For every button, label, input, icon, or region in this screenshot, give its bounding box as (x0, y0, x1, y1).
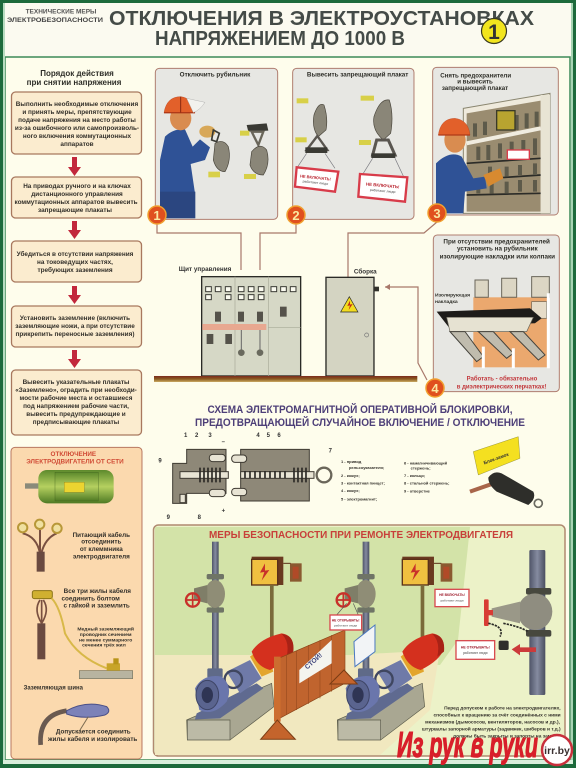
arrow down (68, 157, 81, 176)
title: НАПРЯЖЕНИЕМ ДО 1000 В (155, 27, 405, 50)
sign on valve: работают люди (463, 651, 488, 655)
legend: left column: 5 - электромагнит; (341, 497, 377, 502)
step 5 (12, 370, 142, 435)
watermark logo: irr.by (544, 745, 570, 757)
step 1 (12, 92, 142, 154)
badge: step 3 (428, 204, 446, 222)
panel: insulating covers: установить на рубильник (457, 245, 539, 253)
legend: left column: 4 - кожух; (341, 488, 360, 493)
badge: step 1: 1 (153, 208, 161, 223)
step 4: Установить заземление (включить (20, 315, 130, 322)
step 3: Убедиться в отсутствии напряжения (17, 250, 134, 258)
text: disconnect cable: от клеммника (80, 546, 123, 553)
heading: interlock scheme (195, 403, 525, 429)
heading: disconnect motor: ЭЛЕКТРОДВИГАТЕЛИ ОТ СЕТИ (26, 458, 124, 465)
panel: remove fuses: запрещающий плакат (442, 85, 508, 92)
heading: order of actions: при снятии напряжения (27, 78, 122, 87)
panel: remove fuses (433, 67, 558, 215)
badge: step 3: 3 (433, 206, 441, 221)
badge: number 1 (482, 18, 506, 44)
arrow down (68, 350, 81, 368)
step 1: подаче напряжения на место работы (18, 116, 136, 124)
icon: right breaker with sign: работают люди (370, 188, 396, 194)
step 1: аппаратов (60, 141, 94, 148)
panel: insulating covers: Изолирующая (435, 293, 470, 299)
fence with stop sign (261, 630, 357, 739)
panel: safety during motor repair (154, 525, 565, 756)
text: copper wire note: Медный заземляющий (77, 626, 134, 633)
diagram: interlock scheme: 8 (198, 515, 202, 521)
panel: remove fuses: и вывесить (457, 79, 493, 86)
diagram: interlock scheme: 4 (256, 433, 260, 439)
icon: right breaker with sign: НЕ ВКЛЮЧАТЬ! (366, 182, 400, 189)
diagram: interlock scheme: 3 (208, 433, 212, 439)
blue plate (354, 625, 375, 667)
text: connect all three wires (61, 587, 131, 609)
note: before admitting to work: штурвалы запорной арматуры (задвижек, шиберов и т.д.) (422, 726, 561, 733)
title (109, 7, 534, 50)
legend: left column: 1 - привод (341, 459, 362, 464)
text: disconnect cable: электродвигателя (73, 553, 130, 560)
legend: right column: 7 - кольцо; (404, 473, 425, 478)
arrowhead: connector 4 (385, 284, 390, 290)
badge: step 4: 4 (431, 381, 439, 396)
text: copper wire note: проводник сечением (80, 632, 132, 638)
diagram: interlock scheme: 9 (167, 515, 171, 521)
arrow down (68, 286, 81, 304)
red arrow (512, 644, 536, 655)
badge: step 2 (287, 206, 305, 224)
step 4: прикрепить переносные заземления) (16, 331, 134, 338)
diagram: interlock scheme: 6 (277, 433, 281, 439)
text: copper wire note: не менее суммарного (79, 637, 132, 643)
step 3: на токоведущих частях, (37, 259, 113, 266)
panel: insulating covers (433, 235, 559, 392)
subtitle: section label: ЭЛЕКТРОБЕЗОПАСНОСТИ (7, 17, 103, 24)
note: before admitting to work: способных к вращению за счёт соединённых с ними (433, 711, 561, 718)
step 5: вывесить предупреждающие и (26, 411, 126, 418)
legend: left column: рельсоуказателя; (349, 465, 384, 470)
panel: switch off the breaker (155, 68, 278, 219)
diagram: interlock scheme: 7 (329, 448, 333, 454)
panel: hang prohibiting sign: Вывесить запрещающий плакат (307, 70, 408, 78)
note: before admitting to work: должны быть закрыты и запорты на замок (453, 733, 557, 740)
icon: interlock key with sign (470, 437, 542, 507)
text: connect all three wires: соединить болтом (61, 594, 120, 602)
text: disconnect cable (73, 531, 130, 560)
icon: cable lugs (18, 520, 62, 572)
note: before admitting to work: механизмов (дымососов, вентиляторов, насосов и др.), (425, 720, 561, 726)
heading: interlock scheme: СХЕМА ЭЛЕКТРОМАГНИТНОЙ ОПЕРАТИВНОЙ БЛОКИРОВКИ, (208, 403, 512, 416)
text: insulate wires (47, 728, 137, 743)
label: assembly: Сборка (354, 267, 377, 275)
legend: right column: стержень; (411, 466, 431, 471)
diagram: interlock scheme (158, 433, 542, 521)
heading: safety measures: МЕРЫ БЕЗОПАСНОСТИ ПРИ РЕМОНТЕ ЭЛЕКТРОДВИГАТЕЛЯ (209, 530, 513, 541)
note: before admitting to work (422, 705, 561, 740)
warning text (457, 375, 547, 390)
panel: insulating covers: накладка (435, 299, 458, 305)
subtitle: section label (7, 8, 103, 24)
step 5: под напряжением рабочие части, (23, 402, 129, 410)
equipment: control panel and cabinet (154, 266, 417, 382)
panel: disconnect motor from mains (11, 447, 142, 759)
heading: disconnect motor: ОТКЛЮЧЕНИЕ (51, 451, 96, 458)
cabinet with warning (326, 277, 379, 376)
step 4: заземляющие ножи, а при отсутствие (15, 323, 135, 330)
legend: right column (404, 460, 449, 494)
panel: switch off the breaker: Отключить рубильник (180, 70, 251, 78)
backdrop: wall (155, 527, 470, 665)
text: insulate wires: жилы кабеля и изолировать (47, 735, 137, 743)
icon: worker (160, 97, 215, 218)
pipe with valve (484, 550, 552, 695)
floor (154, 376, 417, 382)
icon: left breaker with sign (295, 98, 338, 192)
step 1: Выполнить необходимые отключения (16, 100, 138, 108)
legend: right column: 6 - намагничивающий (404, 460, 448, 465)
diagram: interlock scheme: – (222, 439, 226, 445)
control panel (202, 277, 301, 376)
step 3 (12, 241, 142, 282)
text: insulate wires: Допускается соединить (56, 728, 131, 735)
panel: insulating covers: При отсутствии предохранителей (443, 238, 550, 246)
step 4 (12, 306, 142, 347)
step 3: требующих заземления (37, 266, 113, 274)
diagram: interlock scheme: 2 (195, 433, 199, 439)
icon: breaker handles (208, 123, 268, 179)
warning text: в диэлектрических перчатках! (457, 384, 547, 390)
sign on valve (456, 641, 495, 659)
heading: interlock scheme: ПРЕДОТВРАЩАЮЩЕЙ СЛУЧАЙНОЕ ВКЛЮЧЕНИЕ / ОТКЛЮЧЕНИЕ (195, 416, 525, 429)
icon: breaker with insulating plate (437, 277, 549, 368)
legend: left column: 3 - контактная пинцет; (341, 480, 385, 485)
sign on motor switch (435, 589, 469, 607)
text: connect all three wires: с гайкой и заземлить (64, 601, 130, 609)
note: before admitting to work: Перед допуском к работе на электродвигателях, (444, 705, 561, 712)
text: copper wire note (77, 626, 134, 649)
right column illustrations (433, 67, 558, 215)
panel: order of actions (12, 69, 142, 435)
connector lines to equipment (157, 222, 437, 380)
pump unit left (186, 542, 302, 740)
icon: left breaker with sign: НЕ ВКЛЮЧАТЬ! (300, 173, 331, 182)
backdrop: floor (155, 650, 440, 755)
icon: grounded cable (32, 591, 133, 679)
badge: step 4 (426, 379, 444, 397)
step 5: «Заземлено», оградить при необходи- (15, 386, 137, 394)
step 2: коммутационных аппаратов вывесить (14, 199, 138, 206)
badge: number 1: 1 (488, 21, 500, 44)
arrow down (68, 221, 81, 239)
step 2: На приводах ручного и на ключах (23, 183, 131, 190)
label: control panel: Щит управления (179, 266, 232, 273)
panel: hang prohibiting sign (293, 68, 414, 219)
legend: right column: 8 - стальной стержень; (404, 480, 449, 485)
icon: worker (436, 118, 503, 213)
panel: insulating covers: изолирующие накладки или колпаки (440, 253, 555, 260)
step 5: Вывесить указательные плакаты (23, 379, 130, 386)
subtitle: section label: ТЕХНИЧЕСКИЕ МЕРЫ (26, 8, 96, 16)
icon: interlock key with sign: Блок-замок (483, 451, 510, 465)
panels 1 and 2 illustrations (155, 68, 414, 219)
step 5: мости рабочие места и оставшиеся (20, 394, 133, 402)
step 1: ного включения коммутационных (23, 133, 132, 140)
text: copper wire note: сечения трёх жил (82, 643, 126, 649)
sign on motor switch: НЕ ВКЛЮЧАТЬ! (439, 593, 465, 597)
icon: insulated wires (40, 704, 109, 745)
sign hanging on valve (330, 603, 362, 630)
step 5: предписывающие плакаты (33, 419, 120, 426)
warning text: Работать - обязательно (467, 375, 538, 382)
label: ground bus: Заземляющая шина (24, 685, 84, 691)
pump unit right (337, 542, 452, 740)
title: ОТКЛЮЧЕНИЯ В ЭЛЕКТРОУСТАНОВКАХ (109, 7, 534, 30)
legend: left column (341, 459, 385, 502)
illustration: pumps and fence (186, 542, 452, 740)
sign on valve: НЕ ОТКРЫВАТЬ! (461, 646, 490, 650)
diagram: interlock scheme: 1 (184, 433, 188, 439)
heading: order of actions: Порядок действия (40, 69, 114, 78)
icon: right breaker with sign (358, 96, 407, 202)
heading: order of actions (27, 69, 122, 87)
diagram: interlock scheme: + (222, 508, 226, 514)
sign hanging on valve: работают люди (334, 624, 357, 628)
legend: left column: 2 - кожух; (341, 473, 360, 478)
legend: right column: 9 - отверстие (404, 489, 431, 494)
heading: disconnect motor (26, 451, 124, 465)
step 2: запрещающие плакаты (38, 207, 112, 214)
panel: remove fuses: Снять предохранители (440, 72, 511, 79)
diagram: interlock scheme: 5 (267, 433, 271, 439)
icon: motor (25, 470, 114, 503)
sign hanging on valve: НЕ ОТКРЫВАТЬ! (332, 619, 359, 623)
fence with stop sign: СТОЙ! (303, 651, 324, 671)
text: connect all three wires: Все три жилы кабеля (64, 587, 131, 595)
icon: fuse cabinet (463, 93, 550, 213)
badge: step 1 (148, 206, 166, 224)
text: disconnect cable: отсоединить (81, 539, 122, 546)
step 1: и принять меры, препятствующие (22, 109, 132, 116)
step 1: из-за ошибочного или самопроизволь- (15, 124, 139, 132)
step 2 (12, 177, 142, 218)
badge: step 2: 2 (292, 208, 300, 223)
illustration: locked valve (422, 550, 561, 740)
step 2: дистанционного управления (31, 191, 123, 198)
icon: left breaker with sign: работают люди (302, 179, 328, 186)
sign on motor switch: работают люди (440, 598, 464, 602)
diagram: interlock scheme: 9 (158, 458, 162, 464)
text: disconnect cable: Питающий кабель (73, 531, 130, 539)
